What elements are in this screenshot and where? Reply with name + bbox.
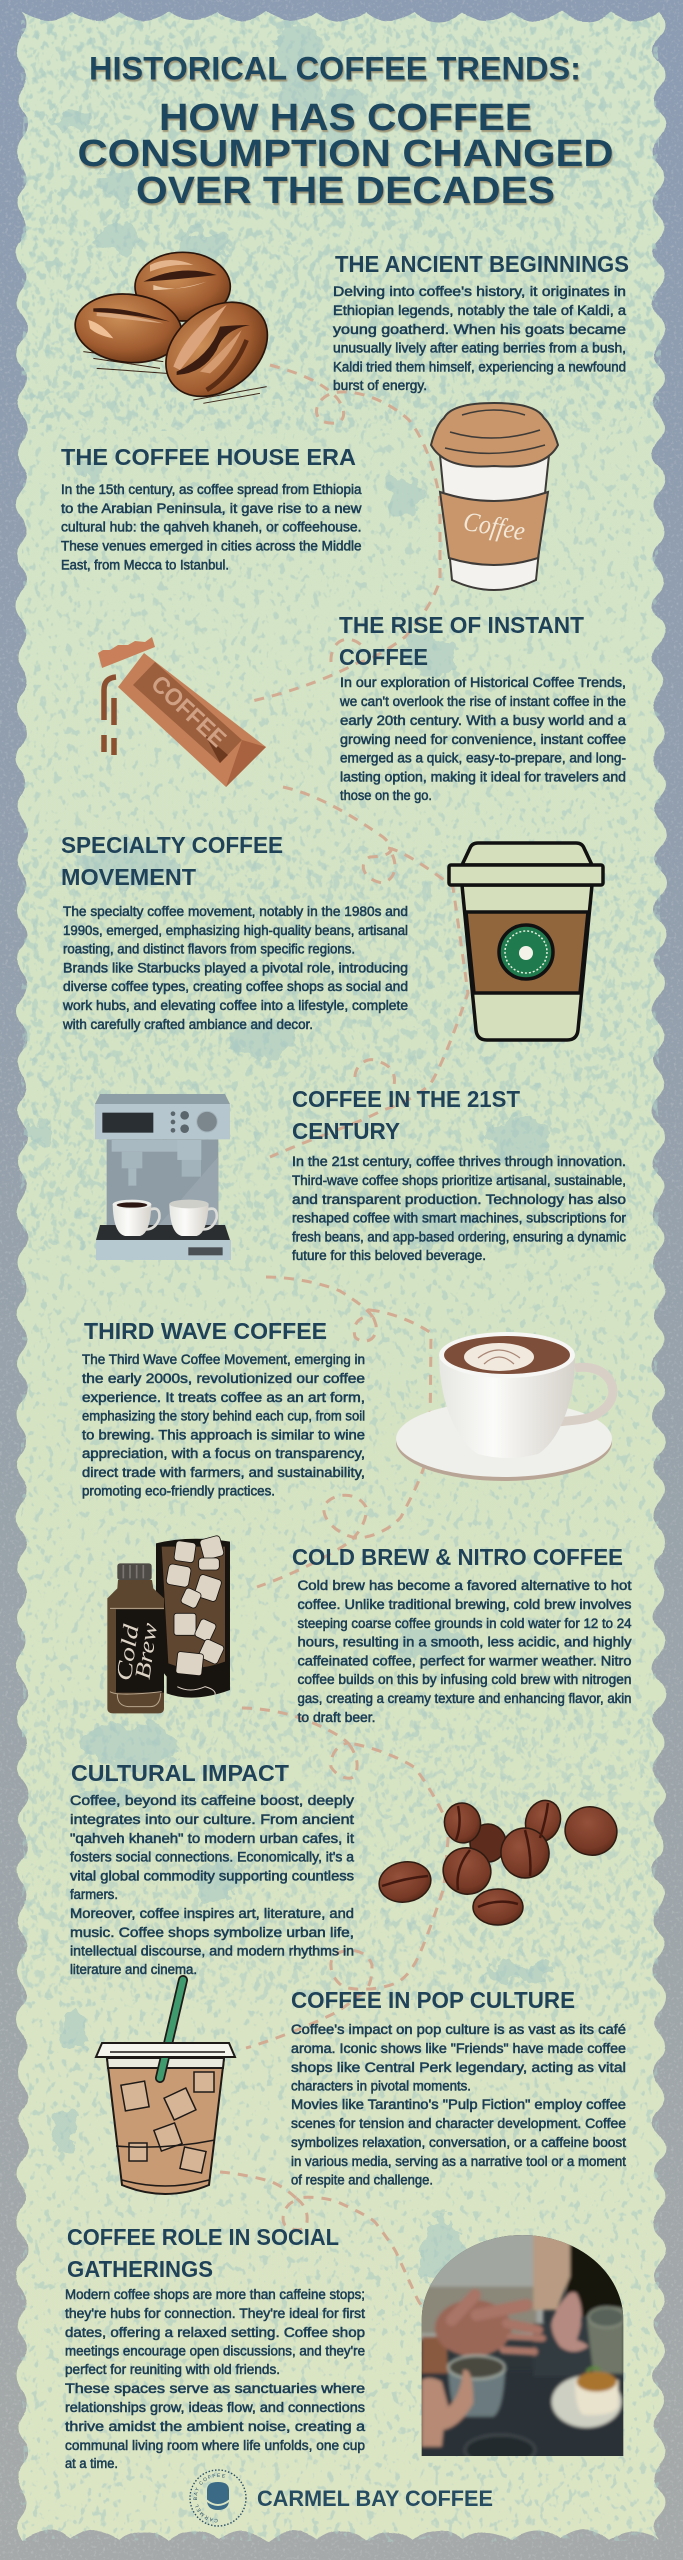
icon: cold brew bottle and iced glass: Brew	[130, 1621, 162, 1681]
heading	[339, 612, 585, 670]
text block: East, from Mecca to Istanbul.	[61, 557, 229, 572]
text block: music. Coffee shops symbolize urban life,	[70, 1925, 354, 1940]
heading: THE RISE OF INSTANT	[339, 612, 585, 638]
heading: COFFEE IN POP CULTURE	[291, 1987, 575, 2013]
icon: outlined paper cup with green logo	[449, 843, 603, 1040]
photo: hands around coffee cups in arched frame	[422, 2235, 624, 2456]
text block: These spaces serve as sanctuaries where	[65, 2381, 365, 2396]
text block: in various media, serving as a narrative tool or a moment	[291, 2154, 626, 2169]
icon: three roasted coffee beans	[72, 252, 286, 416]
text block: burst of energy.	[333, 378, 427, 393]
text block: cultural hub: the qahveh khaneh, or coffeehouse.	[61, 520, 362, 535]
icon: espresso machine	[95, 1094, 231, 1260]
text block: literature and cinema.	[70, 1962, 197, 1977]
heading	[67, 2224, 339, 2282]
text block: Movies like Tarantino's "Pulp Fiction" employ coffee	[291, 2097, 626, 2112]
dashed connector paths	[220, 365, 468, 2310]
heading: COFFEE	[339, 644, 428, 670]
heading: COFFEE IN THE 21ST	[292, 1086, 521, 1112]
text block: emerged as a quick, easy-to-prepare, and long-	[340, 751, 626, 766]
title: CONSUMPTION CHANGED	[78, 133, 614, 175]
title: HOW HAS COFFEE	[159, 97, 532, 139]
panel: cultural impact	[70, 1760, 622, 1977]
text block	[70, 1793, 354, 1977]
text block: promoting eco-friendly practices.	[82, 1484, 275, 1499]
text block	[298, 1578, 632, 1725]
text block: intellectual discourse, and modern rhythms in	[70, 1944, 354, 1959]
panel: coffee in the 21st century	[95, 1086, 627, 1263]
text block: those on the go.	[340, 788, 432, 803]
title: HISTORICAL COFFEE TRENDS:	[89, 50, 581, 86]
text block: Modern coffee shops are more than caffeine stops;	[65, 2287, 365, 2302]
icon: round brand logo: CARMEL BAY COFFEE	[194, 2474, 226, 2522]
text block: gas, creating a creamy texture and enhancing flavor, akin	[298, 1691, 632, 1706]
text block: the early 2000s, revolutionized our coffee	[82, 1371, 365, 1386]
text block: experience. It treats coffee as an art form,	[82, 1390, 365, 1405]
text block: These venues emerged in cities across the Middle	[61, 538, 362, 553]
text block: Ethiopian legends, notably the tale of Kaldi, a	[333, 303, 627, 318]
heading	[292, 1086, 521, 1144]
text block	[62, 904, 408, 1032]
heading: THE ANCIENT BEGINNINGS	[335, 251, 629, 277]
heading: THIRD WAVE COFFEE	[84, 1318, 327, 1344]
text block: coffee. Unlike traditional brewing, cold brew involves	[298, 1597, 632, 1612]
heading: THE COFFEE HOUSE ERA	[61, 444, 356, 470]
text block: growing need for convenience, instant coffee	[340, 732, 626, 747]
text block: to the Arabian Peninsula, it gave rise to a new	[61, 501, 362, 516]
text block: to brewing. This approach is similar to wine	[82, 1427, 365, 1442]
text block: to draft beer.	[298, 1710, 376, 1725]
heading: GATHERINGS	[67, 2256, 213, 2282]
text block: unusually lively after eating berries from a bush,	[333, 341, 626, 356]
text block: fresh beans, and app-based ordering, ensuring a dynamic	[292, 1229, 626, 1244]
text block: In the 15th century, as coffee spread from Ethiopia	[61, 482, 362, 497]
heading: SPECIALTY COFFEE	[61, 832, 283, 858]
text block: In the 21st century, coffee thrives through innovation.	[292, 1154, 626, 1169]
text block: reshaped coffee with smart machines, subscriptions for	[292, 1211, 627, 1226]
text block: roasting, and distinct flavors from specific regions.	[63, 942, 355, 957]
text block: 1990s, emerged, emphasizing high-quality beans, artisanal	[63, 923, 408, 938]
text block: hours, resulting in a smooth, less acidic, and highly	[298, 1635, 632, 1650]
text block	[333, 284, 627, 393]
text block: diverse coffee types, creating coffee shops as social and	[63, 979, 408, 994]
icon: latte cup on saucer	[396, 1332, 613, 1481]
heading: CULTURAL IMPACT	[71, 1760, 290, 1786]
text block: future for this beloved beverage.	[292, 1248, 486, 1263]
icon: scattered coffee beans	[376, 1795, 622, 1925]
text block: perfect for reuniting with old friends.	[65, 2362, 280, 2377]
text block: Moreover, coffee inspires art, literature, and	[70, 1906, 354, 1921]
text block: thrive amidst the ambient noise, creating a	[65, 2419, 366, 2434]
panel: specialty coffee movement	[61, 832, 603, 1040]
text block: The specialty coffee movement, notably in the 1980s and	[63, 904, 408, 919]
text block: integrates into our culture. From ancient	[70, 1812, 354, 1827]
icon: instant coffee sachet	[98, 637, 266, 787]
panel: the coffee house era	[61, 403, 558, 590]
text block: with carefully crafted ambiance and decor.	[62, 1017, 313, 1032]
text block: Third-wave coffee shops prioritize artisanal, sustainable,	[292, 1173, 626, 1188]
icon: takeaway cup with sleeve	[431, 403, 558, 590]
text block: aroma. Iconic shows like "Friends" have made coffee	[291, 2041, 626, 2056]
text block: scenes for tension and character development. Coffee	[291, 2116, 626, 2131]
footer: brand logo and name	[189, 2469, 493, 2527]
text block: early 20th century. With a busy world and a	[340, 713, 627, 728]
text block: steeping coarse coffee grounds in cold water for 12 to 24	[298, 1616, 632, 1631]
text block: characters in pivotal moments.	[291, 2078, 471, 2093]
logo text: Coffee: Coffee	[461, 506, 527, 546]
heading: CENTURY	[292, 1118, 400, 1144]
text block: Delving into coffee's history, it originates in	[333, 284, 626, 299]
text block	[292, 1154, 627, 1263]
text block: young goatherd. When his goats became	[333, 322, 626, 337]
text block: Coffee, beyond its caffeine boost, deeply	[70, 1793, 354, 1808]
text block: at a time.	[65, 2456, 118, 2471]
panel: the rise of instant coffee	[98, 612, 627, 803]
text block: communal living room where life unfolds, one cup	[65, 2438, 365, 2453]
panel: the ancient beginnings	[72, 251, 629, 416]
text block	[291, 2022, 626, 2188]
text block: of respite and challenge.	[291, 2173, 433, 2188]
panel: coffee role in social gatherings	[65, 2224, 630, 2471]
text block: shops like Central Perk legendary, acting as vital	[291, 2060, 626, 2075]
text block: appreciation, with a focus on transparency,	[82, 1446, 365, 1461]
text block: we can't overlook the rise of instant coffee in the	[339, 694, 626, 709]
text block: Kaldi tried them himself, experiencing a newfound	[333, 359, 626, 374]
text block: emphasizing the story behind each cup, from soil	[82, 1409, 365, 1424]
text block: and transparent production. Technology has also	[292, 1192, 626, 1207]
text block: Brands like Starbucks played a pivotal role, introducing	[63, 960, 408, 975]
text block: they're hubs for connection. They're ideal for first	[65, 2306, 365, 2321]
icon: iced coffee with green straw	[96, 1980, 235, 2194]
title	[78, 50, 614, 212]
text block: coffee builds on this by infusing cold brew with nitrogen	[298, 1672, 632, 1687]
text block: fosters social connections. Economically, it's a	[70, 1850, 354, 1865]
text block: caffeinated coffee, perfect for warmer weather. Nitro	[298, 1653, 632, 1668]
heading: COLD BREW & NITRO COFFEE	[292, 1544, 623, 1570]
text block	[65, 2287, 366, 2471]
sachet label: COFFEE	[145, 670, 231, 753]
text block	[339, 675, 627, 803]
panel: coffee in pop culture	[96, 1980, 626, 2194]
heading: MOVEMENT	[61, 864, 197, 890]
text block: relationships grow, ideas flow, and connections	[65, 2400, 365, 2415]
text block: farmers.	[70, 1887, 118, 1902]
brand name: CARMEL BAY COFFEE	[257, 2486, 493, 2511]
text block: lasting option, making it ideal for travelers and	[340, 770, 626, 784]
bottle label text: Cold	[111, 1621, 144, 1682]
text block: work hubs, and elevating coffee into a lifestyle, complete	[62, 998, 408, 1013]
text block: The Third Wave Coffee Movement, emerging in	[82, 1352, 365, 1367]
heading	[61, 832, 283, 890]
text block: symbolizes relaxation, conversation, or a caffeine boost	[291, 2135, 626, 2150]
text block: In our exploration of Historical Coffee Trends,	[340, 675, 626, 690]
panel: third wave coffee	[82, 1318, 613, 1499]
text block: vital global commodity supporting countless	[70, 1868, 354, 1883]
text block: direct trade with farmers, and sustainability,	[82, 1465, 365, 1480]
icon: cold brew bottle and iced glass	[107, 1535, 230, 1713]
text block: "qahveh khaneh" to modern urban cafes, it	[70, 1831, 354, 1846]
text block: Cold brew has become a favored alternative to hot	[298, 1578, 632, 1593]
title: OVER THE DECADES	[136, 170, 555, 212]
text block	[61, 482, 362, 572]
text block: Coffee's impact on pop culture is as vast as its café	[291, 2022, 626, 2037]
heading: COFFEE ROLE IN SOCIAL	[67, 2224, 339, 2250]
icon: round brand logo	[189, 2469, 247, 2527]
panel: cold brew and nitro coffee	[107, 1535, 632, 1725]
text block: meetings encourage open discussions, and they're	[65, 2344, 365, 2359]
text block: dates, offering a relaxed setting. Coffee shop	[65, 2325, 365, 2340]
text block	[82, 1352, 365, 1499]
